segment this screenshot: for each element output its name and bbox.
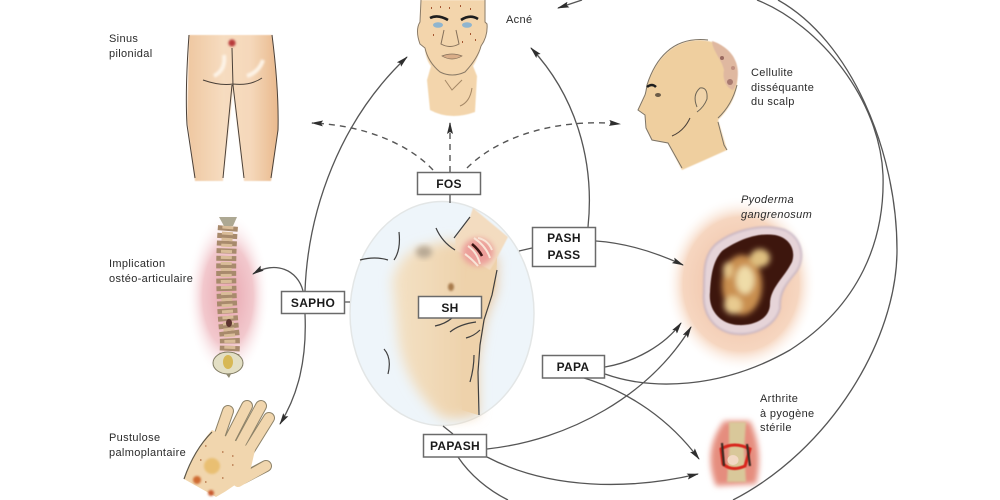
illustration: head in profile with scalp lesions: [638, 40, 738, 170]
box: SAPHO: SAPHO: [291, 296, 335, 310]
illustration: sinus pilonidal (buttocks and legs): [186, 35, 278, 181]
box: PASH PASS: PASH: [547, 231, 581, 245]
label: dissecting cellulitis of the scalp: disséquante: [751, 82, 814, 94]
illustration: hand with palmar pustules: [184, 406, 269, 497]
dashed arrow: FOS to acne: [449, 123, 451, 172]
label: sinus pilonidal: Sinus: [109, 33, 138, 45]
box: SH: SH: [441, 301, 459, 315]
label: osteo-articular involvement: Implication: [109, 258, 165, 270]
label: sterile pyogenic arthritis: Arthrite: [760, 393, 798, 405]
box: PASH PASS: [532, 228, 596, 266]
dashed arrow: FOS to dissecting cellulitis: [467, 123, 620, 168]
label: dissecting cellulitis of the scalp: Cellulite: [751, 67, 793, 79]
box: SAPHO: [282, 292, 344, 314]
label: sterile pyogenic arthritis: stérile: [760, 422, 792, 434]
arrow: into acne from top right: [558, 0, 582, 8]
dashed arrow: FOS to sinus pilonidal: [312, 123, 433, 170]
box: FOS: FOS: [436, 177, 462, 191]
illustration: spine with pink inflammation glow: [186, 212, 270, 380]
arrow: PAPASH lower branch: [458, 457, 508, 500]
box: PASH PASS: PASS: [548, 248, 580, 262]
illustration: pyoderma gangrenosum ulcer: [665, 196, 817, 372]
arrow: PAPASH to arthritis: [487, 457, 698, 484]
box: PAPASH: PAPASH: [430, 439, 480, 453]
illustration: knee with sterile pyogenic arthritis: [711, 421, 759, 486]
illustration: acne face: [418, 0, 487, 116]
label: sterile pyogenic arthritis: à pyogène: [760, 408, 815, 420]
illustration: central chest with hidradenitis in the armpit: [350, 202, 534, 426]
arrow: PASH to pyoderma: [596, 241, 683, 265]
box: PAPASH: [424, 434, 486, 457]
arrow: PAPASH to pyoderma: [487, 327, 691, 449]
arrow: long outer arc from PAPASH: [733, 0, 897, 500]
arrow: SAPHO to pustulosis: [280, 314, 305, 424]
box: PAPA: [542, 356, 604, 378]
arrow: PAPA to arthritis: [584, 378, 699, 459]
connector lines from the central chest to the syndrome boxes: [345, 195, 532, 434]
label: pyoderma gangrenosum: gangrenosum: [741, 209, 812, 221]
label: dissecting cellulitis of the scalp: du scalp: [751, 96, 795, 108]
label: palmoplantar pustulosis: Pustulose: [109, 432, 160, 444]
label: osteo-articular involvement: ostéo-articulaire: [109, 273, 193, 285]
arrow: PASH to acne: [531, 48, 589, 227]
box: SH: [418, 296, 482, 318]
label: palmoplantar pustulosis: palmoplantaire: [109, 447, 186, 459]
label: acne: Acné: [506, 14, 532, 26]
label: sinus pilonidal: pilonidal: [109, 48, 153, 60]
box: PAPA: PAPA: [557, 360, 589, 374]
box: FOS: [418, 172, 480, 194]
arrow: SAPHO to acne: [305, 57, 407, 291]
arrow: PAPA long arc to the top: [605, 0, 883, 384]
arrow: SAPHO to osteo-articular: [253, 268, 303, 291]
arrow: PAPA to pyoderma: [605, 323, 681, 367]
label: pyoderma gangrenosum: Pyoderma: [741, 194, 794, 206]
